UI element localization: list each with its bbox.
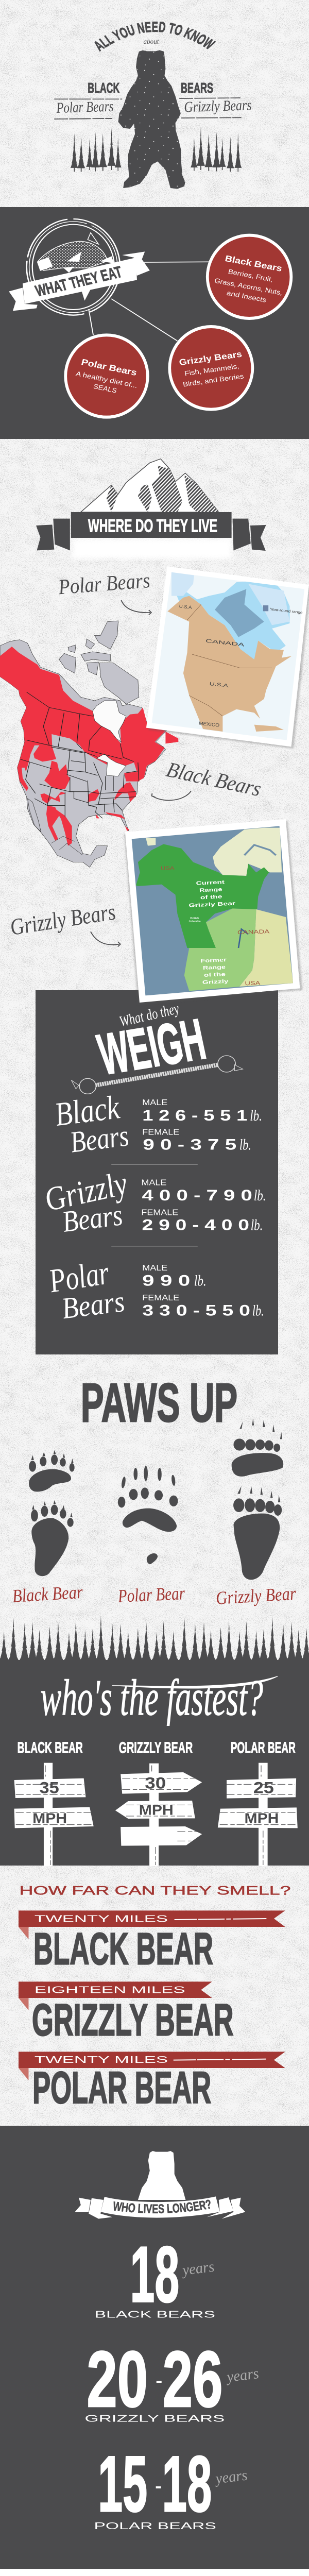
circle: black bears: and Insects <box>226 289 267 304</box>
weights: grizzly bears: Bears <box>60 1198 125 1239</box>
map labels: CANADA <box>237 929 270 936</box>
ribbon: eighteen miles grizzly bear <box>19 1981 233 2045</box>
weights: polar bears: 3 3 0 - 5 5 0 <box>142 1301 250 1319</box>
stat: black bears 18 years: 18 <box>130 2230 179 2319</box>
stat: polar bears 15-18 years: - <box>155 2477 162 2496</box>
script: grizzly bears: Grizzly Bears <box>8 899 117 940</box>
weights: grizzly bears: Grizzly <box>40 1165 132 1218</box>
arctic islands <box>59 621 139 704</box>
icon: black bear paws <box>29 1450 75 1576</box>
circle: grizzly bears: Birds, and Berries <box>182 372 244 388</box>
circle: grizzly bears <box>168 325 254 411</box>
photo paper <box>146 566 309 747</box>
map labels <box>161 866 270 987</box>
weights: grizzly and polar bears <box>40 1165 266 1325</box>
sign: grizzly bear 30 mph: MPH <box>139 1802 174 1818</box>
sign: black bear 35 mph <box>14 1763 94 1866</box>
weights: grizzly bears <box>40 1165 266 1239</box>
ribbon: twenty miles black bear: TWENTY MILES <box>35 1914 168 1924</box>
baja peninsula <box>28 799 41 832</box>
icon: standing bear <box>118 50 185 189</box>
weigh content <box>52 1000 262 1246</box>
sign: grizzly bear 30 mph: 30 <box>145 1774 166 1792</box>
arrow: polar bears <box>121 600 151 615</box>
weights: black bears: MALE <box>142 1097 167 1107</box>
script: grizzly bears: Grizzly Bears <box>184 96 252 115</box>
sign: black bear 35 mph: 35 <box>40 1779 59 1797</box>
photo shadow <box>148 568 309 749</box>
weights: grizzly bears: lb. <box>254 1187 266 1204</box>
panel: who's the fastest <box>0 1660 309 1866</box>
panel: what do they weigh <box>36 990 278 1354</box>
tree line <box>0 1616 309 1660</box>
weights: polar bears: FEMALE <box>142 1293 179 1302</box>
map labels: of the <box>200 894 222 901</box>
weights: black bears: FEMALE <box>142 1127 179 1137</box>
script: black bears: Black Bears <box>164 757 264 801</box>
trees left <box>71 128 122 172</box>
photo paper <box>125 819 300 1003</box>
stat: grizzly bears 20-26 years: 20 <box>87 2335 148 2424</box>
ribbon: eighteen miles grizzly bear: EIGHTEEN MILES <box>35 1985 185 1995</box>
paws section <box>11 1372 297 1608</box>
map content <box>152 572 304 740</box>
weights: grizzly bears: FEMALE <box>141 1207 178 1217</box>
weights: black bears <box>52 1089 262 1159</box>
weights: polar bears: lb. <box>252 1301 264 1319</box>
banner <box>36 512 266 551</box>
weights: polar bears: MALE <box>142 1263 167 1273</box>
map labels: MEXICO <box>198 721 220 728</box>
state and province borders <box>20 692 139 855</box>
map labels: British <box>190 917 199 920</box>
map labels: USA <box>245 980 261 987</box>
header emblem <box>54 22 252 189</box>
map labels: USA <box>161 866 175 871</box>
map labels <box>179 604 303 728</box>
stat: polar bears 15-18 years <box>94 2440 249 2532</box>
heading: bears: BEARS <box>181 80 213 96</box>
stat: grizzly bears 20-26 years: - <box>156 2371 162 2390</box>
ribbon: twenty miles black bear <box>19 1910 285 1974</box>
callouts: map captions and arrows <box>8 568 264 946</box>
weights: grizzly bears: 4 0 0 - 7 9 0 <box>142 1187 252 1204</box>
stat: polar bears 15-18 years: 15 <box>98 2440 147 2529</box>
weights: polar bears <box>45 1255 264 1325</box>
stat: black bears 18 years: BLACK BEARS <box>95 2310 215 2320</box>
weights: black bears: Black <box>52 1089 123 1133</box>
stat: polar bears 15-18 years: years <box>213 2466 249 2487</box>
map labels: Grizzly Bear <box>188 901 236 908</box>
fastest content <box>0 1616 309 1866</box>
weights: polar bears: Bears <box>59 1284 127 1325</box>
sign: grizzly bear 30 mph <box>115 1764 202 1866</box>
circle: polar bears: Polar Bears <box>80 357 138 378</box>
stat: polar bears 15-18 years: POLAR BEARS <box>94 2521 216 2532</box>
weights: black bears: 1 2 6 - 5 5 1 <box>142 1107 247 1124</box>
map labels: Range <box>203 964 226 971</box>
divider <box>111 1164 198 1246</box>
map labels: U.S.A <box>179 604 193 610</box>
labels: paw names <box>11 1582 297 1608</box>
trees right <box>191 128 242 172</box>
heading: black: BLACK <box>88 80 119 96</box>
sign: polar bear 25 mph <box>218 1763 298 1866</box>
rules <box>54 98 242 119</box>
land base <box>0 640 166 867</box>
map photo: grizzly bear range <box>124 819 302 1005</box>
labels: paw names: Black Bear <box>11 1582 84 1606</box>
icon: grizzly bear paws <box>232 1418 283 1580</box>
photo shadow <box>124 821 302 1005</box>
panel: what they eat <box>0 207 309 439</box>
stat: grizzly bears 20-26 years: years <box>224 2365 260 2385</box>
banner <box>9 251 150 311</box>
sign: polar bear 25 mph: MPH <box>244 1810 279 1826</box>
column titles: BLACK BEAR <box>18 1739 83 1756</box>
circle: black bears <box>206 234 293 320</box>
arrow: grizzly bears <box>91 931 121 946</box>
weights: black bears: Bears <box>67 1118 131 1159</box>
icon: bear bust <box>138 2151 185 2200</box>
circle: grizzly bears: Fish, Mammels, <box>184 362 239 377</box>
sign: polar bear 25 mph: 25 <box>253 1779 274 1797</box>
map content <box>128 824 298 998</box>
lifespan header <box>75 2151 245 2320</box>
weights: grizzly bears: MALE <box>141 1178 166 1187</box>
stat: black bears 18 years: years <box>180 2258 215 2279</box>
weights: black bears: lb. <box>239 1136 251 1153</box>
icon: rope <box>72 1056 243 1094</box>
banner title: WHO LIVES LONGER? <box>113 2200 211 2213</box>
sign: black bear 35 mph: MPH <box>32 1810 67 1826</box>
weights: black bears: lb. <box>250 1107 262 1124</box>
column titles: GRIZZLY BEAR <box>119 1739 193 1756</box>
map: north america black bear range <box>0 621 178 867</box>
weights: grizzly bears: 2 9 0 - 4 0 0 <box>142 1216 249 1233</box>
map labels: Former <box>200 957 227 964</box>
banner <box>75 2196 245 2219</box>
icon: mountains <box>81 459 219 513</box>
script: polar bears: Polar Bears <box>56 98 114 116</box>
about: about <box>144 38 159 46</box>
diet diagram <box>9 219 293 419</box>
map labels: U.S.A. <box>209 682 230 689</box>
weights: polar bears: 9 9 0 <box>142 1272 190 1289</box>
stat: polar bears 15-18 years: 18 <box>162 2440 212 2529</box>
stat: grizzly bears 20-26 years <box>85 2335 260 2424</box>
lifespan stats <box>85 2335 260 2532</box>
banner title: WHAT THEY EAT <box>33 263 124 300</box>
panel: who lives longer <box>0 2126 309 2569</box>
map labels: Range <box>199 887 222 893</box>
circle: black bears: Berries, Fruit, <box>228 267 274 283</box>
stat: black bears 18 years <box>95 2230 215 2320</box>
weights: polar bears: Polar <box>45 1255 113 1300</box>
smell section <box>19 1884 290 2113</box>
weights: polar bears: lb. <box>194 1272 207 1289</box>
where do they live header <box>36 459 266 551</box>
map photo: polar bear range <box>138 566 309 749</box>
emblem rings <box>27 219 120 315</box>
title: all you need to know: ALL YOU NEED TO KNOW <box>94 22 216 52</box>
weights: grizzly bears: lb. <box>251 1216 263 1233</box>
circle: polar bears: A healthy diet of... <box>75 369 139 389</box>
labels: paw names: Polar Bear <box>117 1583 186 1606</box>
heading: how far can they smell: HOW FAR CAN THEY SMELL? <box>19 1884 290 1897</box>
map labels: Columbia <box>189 920 201 923</box>
stat: grizzly bears 20-26 years: GRIZZLY BEARS <box>85 2414 225 2424</box>
red range <box>0 647 178 846</box>
circle: black bears: Black Bears <box>224 253 283 274</box>
map labels: Current <box>196 879 225 886</box>
map labels: Year-round range <box>269 607 303 615</box>
circle: black bears: Grass, Acorns, Nuts, <box>214 277 283 297</box>
circle: polar bears <box>64 333 149 419</box>
map labels: of the <box>204 972 226 978</box>
ribbon: twenty miles polar bear: TWENTY MILES <box>35 2055 168 2065</box>
circle: grizzly bears: Grizzly Bears <box>178 349 243 367</box>
icon: trout <box>38 233 113 300</box>
map labels: CANADA <box>205 638 245 648</box>
banner title <box>113 2200 211 2213</box>
stat: grizzly bears 20-26 years: 26 <box>163 2335 222 2424</box>
script: what do they: What do they <box>117 1000 182 1030</box>
icon: polar bear paw <box>118 1466 178 1564</box>
circle: polar bears: SEALS <box>93 382 118 394</box>
column titles <box>18 1739 296 1756</box>
map labels: Grizzly <box>202 978 229 986</box>
arrow: black bears <box>152 791 191 800</box>
weights: black bears: 9 0 - 3 7 5 <box>143 1136 236 1153</box>
connectors <box>89 262 209 341</box>
script: polar bears: Polar Bears <box>57 568 151 599</box>
great lakes and hudson bay <box>22 701 126 788</box>
